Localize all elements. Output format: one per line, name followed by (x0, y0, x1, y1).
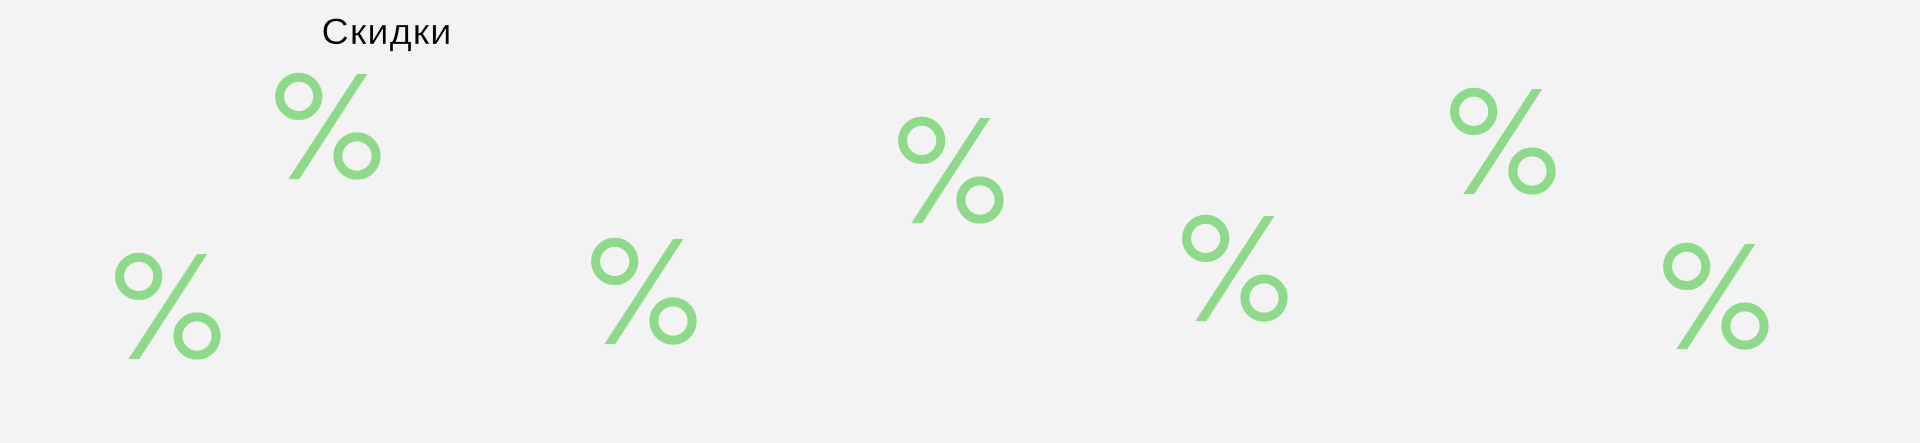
icon: percent sign 6 (1455, 89, 1551, 194)
title: Скидки (322, 12, 452, 52)
icon: percent sign 2 (120, 254, 216, 359)
icon: percent sign 4 (903, 118, 999, 223)
icon: percent sign 7 (1668, 244, 1764, 349)
icon: percent sign 3 (596, 239, 692, 344)
icon: percent sign 1 (280, 74, 376, 179)
icon: percent sign 5 (1187, 216, 1283, 321)
